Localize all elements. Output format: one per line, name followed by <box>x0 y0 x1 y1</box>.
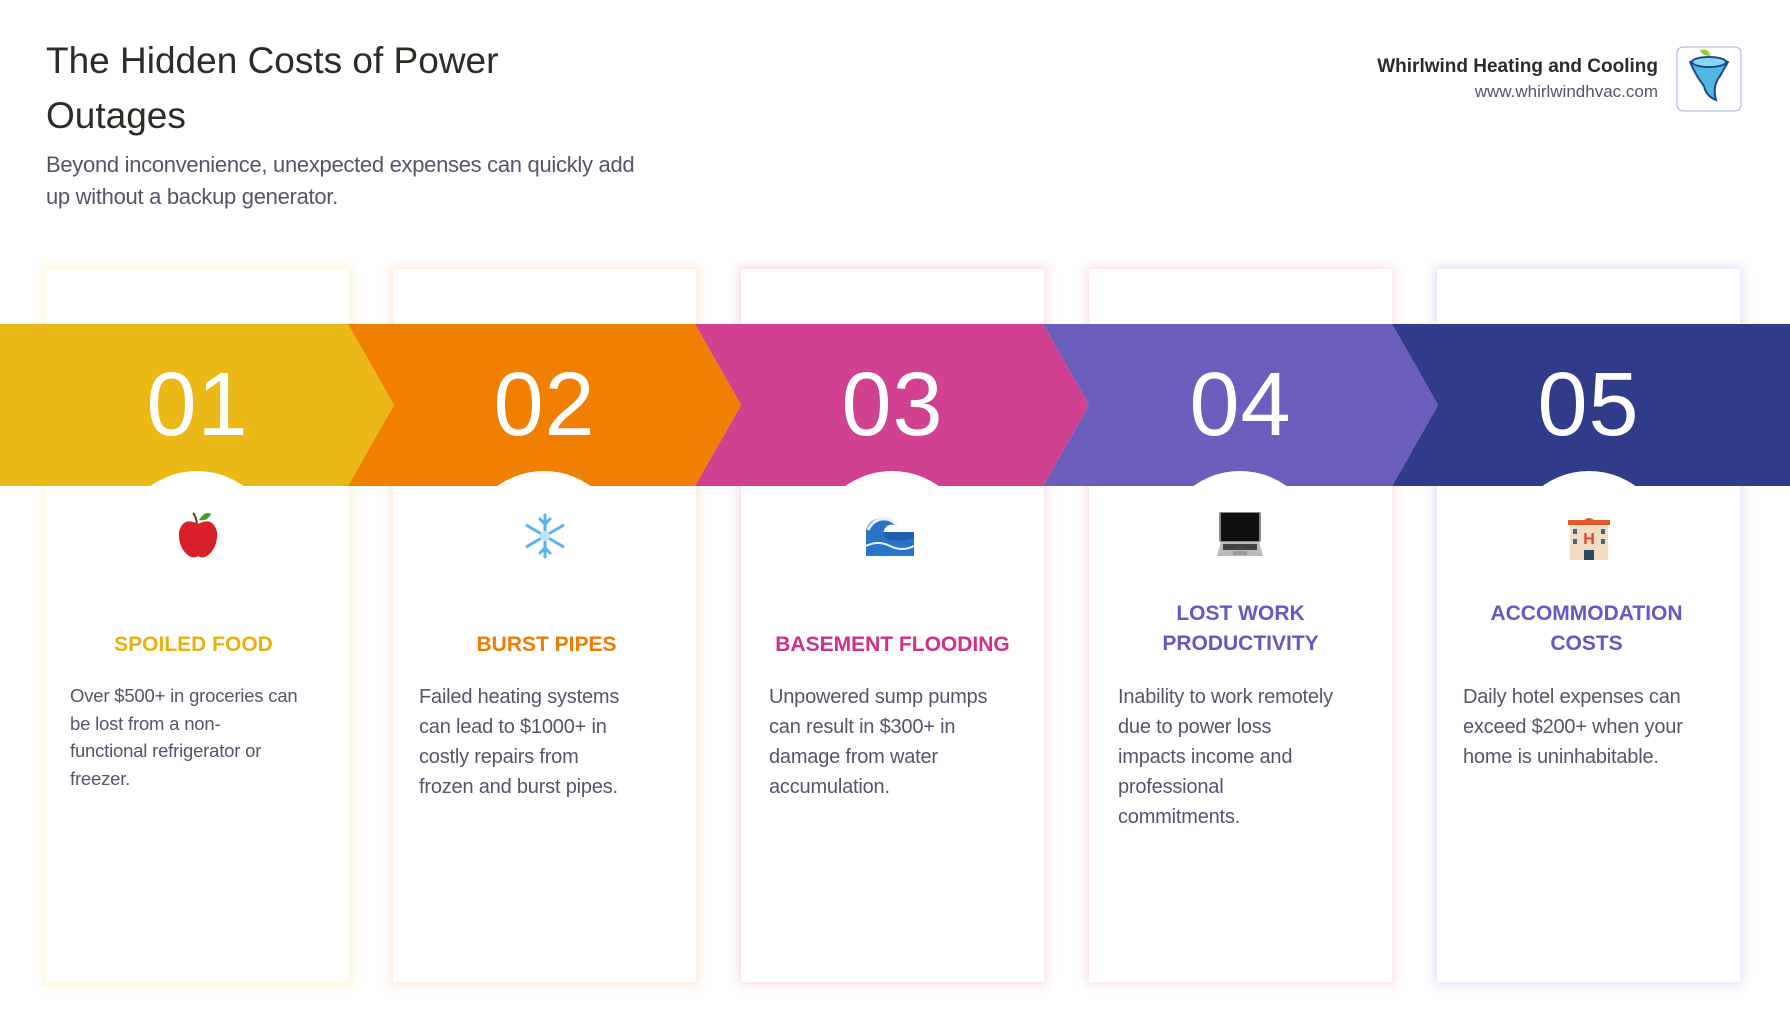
title: The Hidden Costs of Power <box>46 40 498 81</box>
heading: SPOILED FOOD <box>114 633 273 656</box>
text: Unpowered sump pumps <box>769 686 987 708</box>
text <box>1118 686 1333 828</box>
icon: wave <box>866 518 914 556</box>
panel: burst pipes <box>419 514 619 798</box>
website: www.whirlwindhvac.com <box>1475 82 1658 101</box>
text: accumulation. <box>769 776 890 798</box>
text: professional <box>1118 776 1223 798</box>
text: damage from water <box>769 746 938 768</box>
heading: COSTS <box>1550 632 1623 655</box>
number 01: 01 <box>146 355 249 455</box>
title: Outages <box>46 95 186 136</box>
text: Over $500+ in groceries can <box>70 685 298 706</box>
icon: apple <box>178 512 218 558</box>
heading <box>1162 602 1319 655</box>
text: functional refrigerator or <box>70 740 261 761</box>
icon: snowflake <box>525 514 565 558</box>
text: costly repairs from <box>419 746 579 768</box>
number 04: 04 <box>1189 355 1292 455</box>
text: commitments. <box>1118 806 1240 828</box>
text <box>769 686 987 798</box>
heading: ACCOMMODATION <box>1490 602 1683 625</box>
panel: basement flooding <box>769 518 1010 798</box>
panel: lost work productivity <box>1118 512 1333 828</box>
heading: BASEMENT FLOODING <box>775 633 1010 656</box>
text: home is uninhabitable. <box>1463 746 1659 768</box>
text: Daily hotel expenses can <box>1463 686 1681 708</box>
text: exceed $200+ when your <box>1463 716 1683 738</box>
icon: hotel <box>1568 518 1610 560</box>
text: Inability to work remotely <box>1118 686 1333 708</box>
title <box>46 40 498 136</box>
icon: hotel: H <box>1583 531 1595 548</box>
text: frozen and burst pipes. <box>419 776 618 798</box>
text: can result in $300+ in <box>769 716 955 738</box>
text: Failed heating systems <box>419 686 619 708</box>
text <box>419 686 619 798</box>
text: can lead to $1000+ in <box>419 716 607 738</box>
text: be lost from a non- <box>70 712 220 734</box>
number 02: 02 <box>493 355 596 455</box>
text: impacts income and <box>1118 746 1292 768</box>
subtitle <box>46 152 634 209</box>
text <box>70 685 298 788</box>
heading: BURST PIPES <box>476 633 617 656</box>
subtitle: up without a backup generator. <box>46 184 338 209</box>
number 03: 03 <box>841 355 944 455</box>
icon: laptop <box>1217 512 1263 556</box>
heading: LOST WORK <box>1176 602 1305 625</box>
text: due to power loss <box>1118 716 1271 738</box>
text <box>1463 686 1683 768</box>
heading <box>1490 602 1683 655</box>
heading: PRODUCTIVITY <box>1162 632 1319 655</box>
panel: spoiled food <box>70 512 298 788</box>
number 05: 05 <box>1537 355 1640 455</box>
panel: accommodation costs <box>1463 518 1683 768</box>
subtitle: Beyond inconvenience, unexpected expenses can quickly add <box>46 152 634 177</box>
text: freezer. <box>70 768 130 788</box>
company name: Whirlwind Heating and Cooling <box>1377 56 1658 77</box>
brand block <box>1377 46 1742 112</box>
card shadows / cards <box>46 269 349 982</box>
logo <box>1676 46 1742 112</box>
